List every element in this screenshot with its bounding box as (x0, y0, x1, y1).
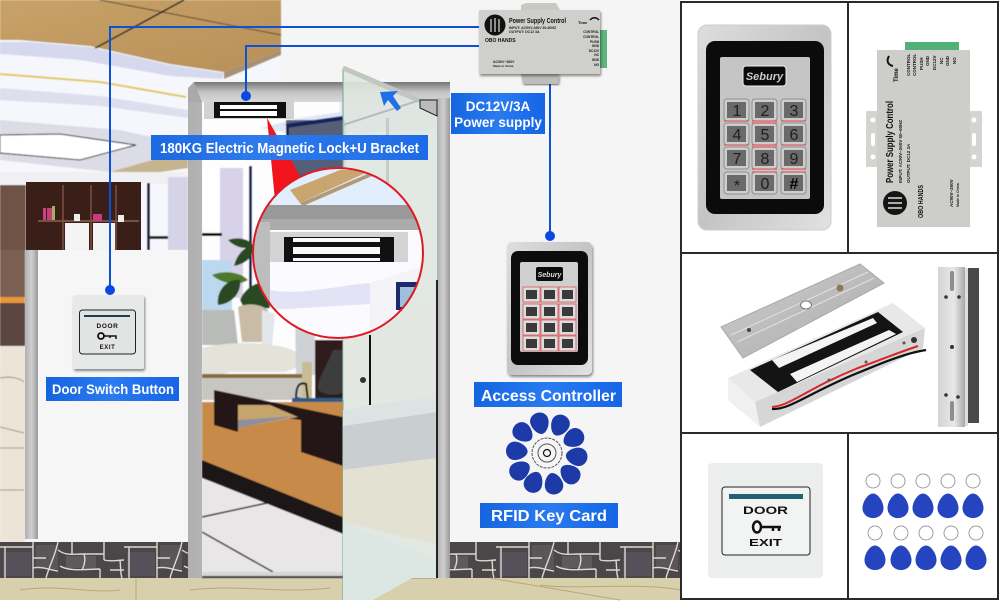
label: RFID key card (480, 503, 618, 528)
power supply unit, top: CONTROL (583, 30, 599, 34)
product: power supply unit: NC (939, 57, 944, 64)
product: keypad: Sebury (746, 71, 784, 83)
product: exit button: EXIT (749, 538, 782, 549)
power supply unit, top: Power Supply Control (509, 18, 566, 25)
door exit button, scene: DOOR (97, 323, 118, 330)
access controller keypad, scene (507, 242, 592, 375)
product grid frame (681, 2, 998, 599)
power supply unit, top: OUTPUT: DC12 3A (509, 30, 540, 34)
white wall panel (25, 250, 188, 542)
wiring end dots (105, 91, 555, 295)
power supply unit, top: PUSH (590, 40, 600, 44)
product: power supply unit: CONTROL (906, 54, 911, 76)
keypad digits: * (734, 178, 740, 195)
product: RFID key fobs (862, 474, 986, 570)
power supply unit, top: NC (594, 53, 600, 57)
label: power supply: DC12V/3A (466, 99, 531, 114)
access controller keypad, scene: Sebury (538, 272, 562, 279)
product: power supply unit: GND (945, 55, 950, 66)
product: U bracket (938, 267, 979, 427)
keypad digits: 2 (761, 103, 770, 120)
keypad digits (733, 103, 799, 195)
keypad digits: 3 (790, 103, 799, 120)
product: exit button: DOOR (743, 505, 788, 517)
left room interior (0, 0, 281, 542)
vase and table items (318, 350, 343, 395)
keypad digits: 8 (761, 151, 770, 168)
lock body (728, 303, 925, 402)
product: power supply unit: INPUT: AC90V~260V 50~60HZ (898, 120, 903, 183)
product: power supply unit: PUSH (919, 57, 924, 70)
power supply unit, top: Time (578, 20, 588, 25)
product: power supply unit: CONTROL (912, 54, 917, 76)
carpet (202, 402, 343, 517)
wiring: connection lines (110, 27, 550, 290)
product: power supply unit: AC90V~260V (949, 179, 954, 207)
arrow: door opening direction (380, 91, 401, 111)
wires (772, 350, 926, 409)
armature plate (721, 264, 884, 358)
label: magnetic lock: 180KG Electric Magnetic Lock+U Bracket (160, 141, 419, 157)
coffee table (214, 390, 343, 466)
keypad digits: 5 (761, 127, 770, 144)
power supply unit, top: INPUT: AC90V-260V 50-60HZ (509, 26, 557, 30)
product: power supply unit: Made in China (956, 183, 960, 207)
product: keypad (698, 25, 831, 230)
label: power supply (451, 93, 545, 134)
power supply unit, top: GND (592, 44, 600, 48)
living room through door (202, 100, 437, 578)
label: access controller (474, 382, 622, 407)
scene background wall (0, 0, 680, 600)
keypad digits: 4 (733, 127, 742, 144)
power supply unit, top: AC90V~260V (493, 60, 515, 64)
stone wall base (0, 542, 680, 578)
keypad digits: 9 (790, 151, 799, 168)
product: magnetic lock and armature plate (721, 264, 926, 427)
keypad red backlight (724, 121, 806, 172)
carpet edge and tiles (202, 460, 343, 534)
keypad digits: # (790, 176, 799, 193)
keypad digits: 6 (790, 127, 799, 144)
power supply unit, top (479, 3, 607, 84)
magnified lens: magnetic lock (253, 168, 426, 338)
power supply unit, top: Made in China (493, 64, 514, 68)
product: power supply unit: OUTPUT: DC12 3A (906, 143, 911, 183)
power supply unit, top: GND (592, 58, 600, 62)
keypad key faces (727, 102, 803, 191)
label: access controller: Access Controller (481, 388, 616, 405)
key rings (866, 474, 983, 540)
glass door (343, 68, 438, 600)
sofa (202, 310, 238, 345)
red callout wedge (267, 118, 300, 200)
product: exit button (708, 463, 823, 578)
product: power supply unit (866, 42, 982, 227)
fob bodies (862, 493, 986, 570)
bookshelf (26, 182, 141, 250)
keypad digits: 1 (733, 103, 742, 120)
label: door switch button: Door Switch Button (52, 381, 174, 397)
door frame (188, 82, 450, 578)
marble floor (0, 578, 680, 600)
small magnetic lock on frame (204, 101, 294, 119)
label: RFID key card: RFID Key Card (491, 508, 607, 525)
label: power supply: Power supply (454, 115, 542, 130)
keypad key frames (724, 99, 806, 194)
product: power supply unit: DC12V (932, 55, 937, 70)
product: power supply unit: Power Supply Control (884, 101, 896, 183)
label: door switch button (46, 377, 179, 401)
keypad digits: 0 (761, 176, 770, 193)
product: power supply unit: GND (925, 55, 930, 66)
power supply unit, top: NO (594, 63, 600, 67)
door exit button, scene (73, 295, 144, 369)
product: power supply unit: NO (952, 57, 957, 64)
label: magnetic lock (151, 135, 428, 160)
product: power supply unit: Time (894, 67, 900, 82)
keypad digits: 7 (733, 151, 742, 168)
power supply unit, top: OBO HANDS (485, 38, 516, 44)
RFID key fobs ring (505, 411, 589, 496)
power supply unit, top: DC12V (589, 49, 600, 53)
plant (212, 238, 270, 310)
product: power supply unit: OBO HANDS (918, 185, 925, 218)
door exit button, scene: EXIT (100, 345, 115, 351)
power supply unit, top: CONTROL (583, 35, 599, 39)
